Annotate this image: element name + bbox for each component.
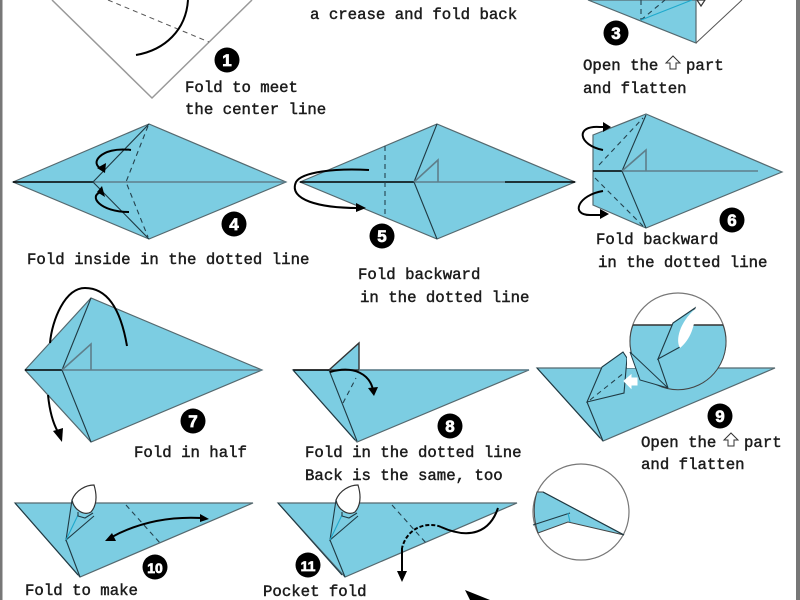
step 10 head leaf <box>66 485 96 540</box>
step 10 paper <box>15 503 253 577</box>
step 5 badge: 5 <box>377 227 387 246</box>
step 11 pocket arrow <box>397 508 498 582</box>
step 3 caption: Open the <box>583 57 658 75</box>
step 7 arrow <box>48 288 127 442</box>
step 6 <box>579 114 782 272</box>
step 9 badge <box>708 404 732 428</box>
step 3 white flap <box>696 0 742 43</box>
step 9 caption: and flatten <box>641 456 745 474</box>
step 10 badge <box>142 554 168 580</box>
step 1 caption: the center line <box>185 101 326 119</box>
step 5 caption: in the dotted line <box>360 289 529 307</box>
step 8 <box>293 343 529 485</box>
step 9 magnified circle <box>630 293 726 390</box>
step 5 badge <box>370 224 394 248</box>
step 1 badge: 1 <box>222 51 232 70</box>
step 6 badge: 6 <box>727 211 737 230</box>
step 8 arrow <box>330 370 378 396</box>
left frame edge <box>0 0 2 600</box>
step 11 badge: 11 <box>301 558 316 574</box>
step 6 caption: Fold backward <box>596 231 718 249</box>
step 10 badge: 10 <box>147 560 163 576</box>
step 7 badge <box>180 408 206 434</box>
step 1 <box>52 0 326 119</box>
step 8 caption: Back is the same, too <box>305 467 503 485</box>
step 9 badge: 9 <box>715 407 725 426</box>
step 7 fold lines <box>25 298 262 442</box>
step 4 arrows <box>96 149 131 212</box>
step 7 paper <box>25 298 262 442</box>
step 4 badge: 4 <box>229 215 239 234</box>
step 3 creases <box>641 0 692 20</box>
step 7 badge: 7 <box>188 412 198 431</box>
step 2 caption: a crease and fold back <box>310 6 517 24</box>
step 1 caption <box>185 79 326 119</box>
step 3 caption: and flatten <box>583 80 687 98</box>
step 6 paper <box>593 114 782 228</box>
step 10 <box>15 485 253 600</box>
step 9 caption <box>641 433 782 474</box>
step 6 caption: in the dotted line <box>598 254 767 272</box>
step 5 caption: Fold backward <box>358 266 480 284</box>
step 4 paper <box>13 124 286 239</box>
step 11 head leaf <box>330 485 360 540</box>
step 11 <box>263 485 517 600</box>
step 8 badge: 8 <box>445 417 455 436</box>
step 9 paper <box>537 368 775 441</box>
step 5 <box>295 124 575 307</box>
step 11 paper <box>278 503 517 577</box>
step 6 fold lines <box>593 115 758 228</box>
step 8 paper <box>293 370 529 442</box>
step 11 badge <box>296 552 320 578</box>
step 1 paper outline <box>52 0 252 98</box>
step 5 arrow <box>295 170 369 212</box>
step 1 crease <box>108 0 209 42</box>
step 4 caption: Fold inside in the dotted line <box>27 251 309 269</box>
next step arrow <box>465 590 490 600</box>
step 4 fold lines <box>13 124 286 239</box>
step 8 badge <box>438 414 462 438</box>
step 9 fold lines <box>537 354 640 441</box>
step 5 caption <box>358 266 529 307</box>
step 6 arrows <box>579 122 611 219</box>
step 10 fold lines <box>15 503 160 577</box>
step 1 arrow <box>136 0 188 55</box>
step 3 paper <box>588 0 696 43</box>
step 9 <box>537 293 782 474</box>
step 9 caption: Open the <box>641 434 716 452</box>
right frame edge <box>796 0 800 600</box>
step 8 fold lines <box>293 370 529 441</box>
head detail circle <box>533 464 629 560</box>
step 4 badge <box>222 212 246 236</box>
step 3 badge <box>604 20 628 46</box>
step 11 fold lines <box>278 503 426 577</box>
step 3 badge: 3 <box>611 24 621 43</box>
step 9 flap <box>587 352 627 402</box>
step 9 caption: part <box>744 434 782 452</box>
step 10 double arrow <box>105 514 209 541</box>
step 1 badge <box>214 48 240 72</box>
step 8 ear flap <box>329 343 359 370</box>
step 6 caption <box>596 231 767 272</box>
step 3 <box>583 0 742 98</box>
step 7 <box>25 288 262 462</box>
step 6 badge <box>720 208 744 232</box>
step 1 caption: Fold to meet <box>185 79 298 97</box>
step 5 fold lines <box>300 124 575 239</box>
step 9 white arrow <box>624 375 637 388</box>
step 8 caption <box>305 444 522 485</box>
step 3 white arrow <box>697 0 705 6</box>
step 5 paper <box>300 124 575 239</box>
step 8 caption: Fold in the dotted line <box>305 444 522 462</box>
step 10 caption: Fold to make <box>25 582 138 600</box>
step 7 caption: Fold in half <box>134 444 247 462</box>
step 3 caption: part <box>686 57 724 75</box>
step 4 <box>13 124 309 269</box>
step 3 caption <box>583 56 724 98</box>
